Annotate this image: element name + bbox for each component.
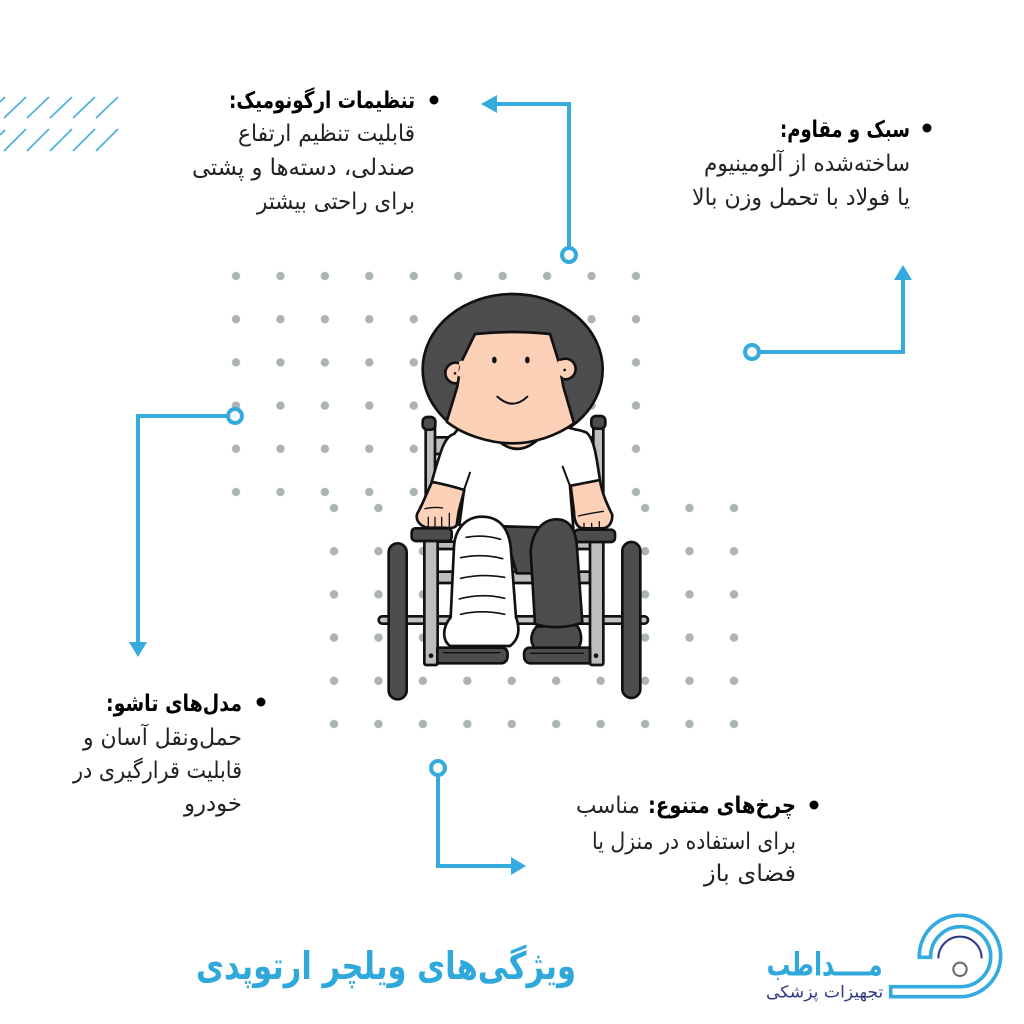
right footrest: [524, 648, 590, 663]
shoe: [531, 625, 581, 648]
text block: ergonomic settings: [192, 87, 438, 215]
left wheel: [389, 543, 407, 699]
left armrest: [412, 528, 452, 541]
logo: [766, 915, 1001, 1002]
arrow: to varied wheels: [431, 761, 526, 875]
text block: light and strong: [692, 117, 932, 211]
text block: ergonomic settings: برای راحتی بیشتر: [256, 189, 415, 215]
logo mark: [891, 915, 1001, 997]
right arm: [571, 480, 612, 528]
right wheel: [622, 542, 640, 698]
illustration: person in wheelchair: [379, 294, 648, 699]
logo name: مــــداطب: [767, 945, 883, 983]
text block: foldable models: خودرو: [183, 791, 242, 817]
fingers: [425, 507, 603, 528]
face: [445, 332, 576, 443]
arrow: to light and strong: [745, 265, 912, 359]
dot grid upper: [230, 270, 642, 498]
arrow: to foldable models: [129, 409, 242, 657]
title: ویژگی‌های ویلچر ارتوپدی: [196, 944, 576, 989]
text block: foldable models: حمل‌ونقل آسان و: [82, 723, 242, 751]
right leg: [531, 519, 582, 627]
logo subtitle: تجهیزات پزشکی: [766, 982, 884, 1002]
text block: ergonomic settings: قابلیت تنظیم ارتفاع: [238, 121, 415, 147]
left footrest: [437, 648, 508, 663]
text block: foldable models: قابلیت قرارگیری در: [72, 757, 242, 784]
text block: light and strong: سبک و مقاوم:: [780, 117, 910, 143]
text block: varied wheels: مناسب: [576, 793, 640, 819]
text block: varied wheels: چرخ‌های متنوع:: [648, 793, 796, 819]
dot grid lower: [328, 502, 740, 730]
decorative diagonal stripes: [0, 97, 118, 151]
axle: [379, 616, 648, 624]
right armrest: [574, 530, 615, 542]
leg cast: [444, 517, 518, 646]
text block: ergonomic settings: صندلی، دسته‌ها و پشتی: [192, 155, 415, 181]
hair: [423, 294, 603, 445]
text block: varied wheels: برای استفاده در منزل یا: [592, 829, 796, 855]
left arm: [417, 482, 464, 528]
text block: foldable models: مدل‌های تاشو:: [106, 691, 242, 717]
text block: varied wheels: [576, 793, 818, 887]
lap: [503, 527, 547, 573]
wheelchair frame: [423, 416, 605, 665]
text block: light and strong: یا فولاد با تحمل وزن بالا: [692, 185, 910, 211]
shirt: [432, 427, 600, 528]
text block: varied wheels: فضای باز: [703, 861, 796, 887]
arrow: to ergonomic settings: [481, 95, 576, 262]
neck: [497, 439, 538, 449]
text block: foldable models: [72, 691, 266, 817]
text block: ergonomic settings: تنظیمات ارگونومیک:: [229, 87, 415, 114]
text block: light and strong: ساخته‌شده از آلومینیوم: [704, 149, 910, 177]
